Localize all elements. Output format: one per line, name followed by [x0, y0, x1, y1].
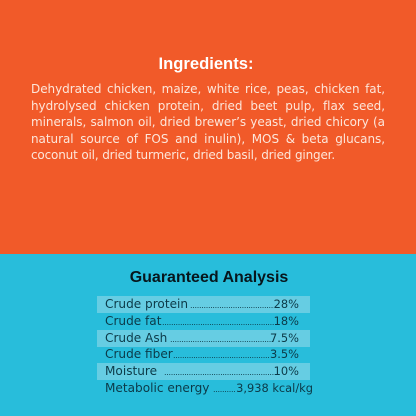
- row: metabolic energy: Metabolic energy: [105, 381, 209, 395]
- row: crude ash: 7.5%: [270, 330, 299, 344]
- row: crude fiber: Crude fiber: [105, 347, 173, 361]
- text block: ingredient list: coconut oil, dried turmeric, dried basil, dried ginger.: [31, 148, 335, 162]
- text block: ingredient list: hydrolysed chicken protein, dried beet pulp, flax seed,: [31, 99, 385, 113]
- row: moisture: Moisture: [105, 364, 157, 378]
- row: crude protein: 28%: [274, 297, 299, 311]
- row: crude fat: Crude fat: [105, 314, 161, 328]
- row: crude fat: [105, 314, 299, 328]
- row: crude protein: Crude protein: [105, 297, 188, 311]
- row: crude protein: [105, 297, 299, 311]
- heading: guaranteed analysis: Guaranteed Analysis: [130, 269, 288, 286]
- row: crude fiber: 3.5%: [270, 347, 299, 361]
- text block: ingredient list: natural source of FOS and inulin), MOS & beta glucans,: [31, 132, 385, 146]
- panel: ingredients: [0, 0, 416, 254]
- row: moisture: [105, 364, 299, 378]
- row: metabolic energy: [105, 381, 313, 395]
- row band: moisture: [97, 363, 310, 380]
- text block: ingredient list: Dehydrated chicken, maize, white rice, peas, chicken fat,: [31, 82, 385, 96]
- row: moisture: 10%: [274, 364, 299, 378]
- row band: crude protein: [97, 296, 310, 313]
- row: metabolic energy: 3,938 kcal/kg: [236, 381, 313, 395]
- row: crude fiber: [105, 347, 299, 361]
- row: crude fat: 18%: [274, 314, 299, 328]
- text block: ingredient list: [31, 82, 385, 162]
- text block: ingredient list: minerals, salmon oil, dried brewer’s yeast, dried chicory (a: [31, 115, 385, 129]
- row: crude ash: Crude Ash: [105, 330, 167, 344]
- row band: crude ash: [97, 330, 310, 346]
- heading: ingredients: Ingredients:: [159, 54, 253, 72]
- panel: guaranteed analysis: [0, 254, 416, 416]
- row: crude ash: [105, 330, 299, 344]
